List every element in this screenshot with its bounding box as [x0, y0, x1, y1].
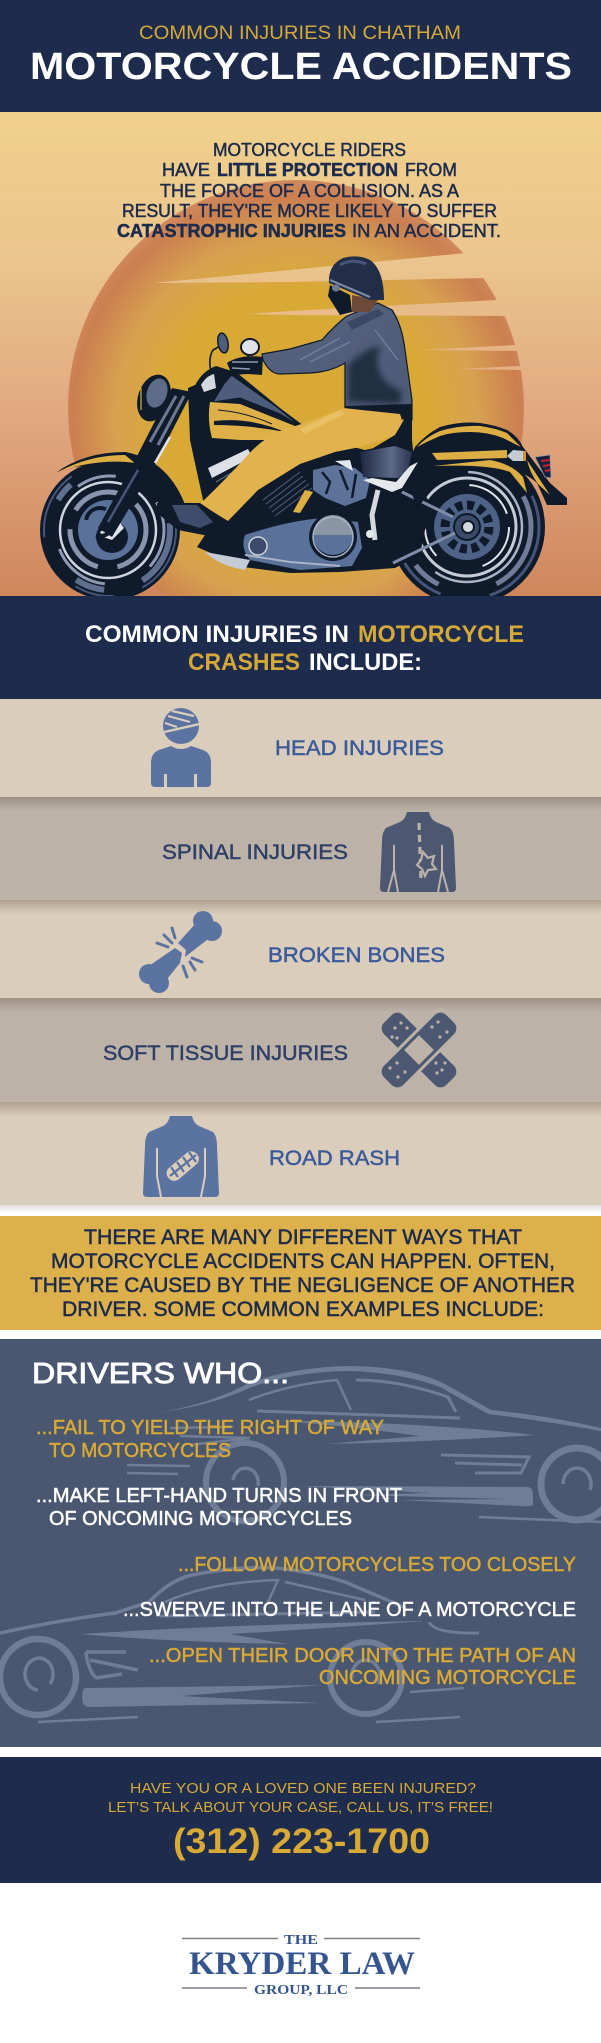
drivers heading: DRIVERS WHO... [32, 1358, 289, 1390]
chrome strip [335, 460, 418, 492]
rider jacket [262, 303, 412, 420]
header subtitle: COMMON INJURIES IN CHATHAM [139, 22, 461, 44]
statement text: DRIVER. SOME COMMON EXAMPLES INCLUDE: [62, 1298, 544, 1321]
headlight [131, 370, 177, 426]
heading text: MOTORCYCLE [358, 621, 524, 648]
hero intro text: MOTORCYCLE RIDERS [213, 140, 406, 160]
rider helmet and face [328, 256, 384, 315]
tank [209, 374, 300, 440]
panel: drivers who [0, 1339, 601, 1747]
motorcycle and rider illustration [40, 256, 567, 605]
heading text: INCLUDE: [309, 649, 422, 676]
hero intro text: LITTLE PROTECTION [217, 160, 398, 180]
label: ROAD RASH [269, 1146, 400, 1170]
glove [227, 356, 263, 375]
statement text: THERE ARE MANY DIFFERENT WAYS THAT [84, 1226, 522, 1249]
front wheel [40, 460, 180, 600]
logo: THE [284, 1933, 318, 1948]
rider boot [157, 503, 228, 537]
row: soft tissue injuries [0, 998, 601, 1102]
label: SPINAL INJURIES [162, 840, 348, 864]
forks [98, 388, 192, 537]
panel: call to action [0, 1757, 601, 1883]
row: spinal injuries [0, 797, 601, 900]
label: SOFT TISSUE INJURIES [103, 1041, 348, 1065]
heading text [85, 621, 524, 676]
row: road rash [0, 1102, 601, 1205]
list of driver behaviours: ...SWERVE INTO THE LANE OF A MOTORCYCLE [123, 1599, 576, 1621]
sun with speed stripes [68, 180, 550, 636]
panel: common injuries heading [0, 596, 601, 699]
call to action text: LET’S TALK ABOUT YOUR CASE, CALL US, IT’S FREE! [108, 1799, 493, 1816]
hero intro text: RESULT, THEY'RE MORE LIKELY TO SUFFER [122, 201, 497, 221]
list of driver behaviours: ...FOLLOW MOTORCYCLES TOO CLOSELY [178, 1554, 576, 1576]
engine details [205, 449, 455, 570]
label: HEAD INJURIES [275, 736, 444, 760]
call to action text: HAVE YOU OR A LOVED ONE BEEN INJURED? [130, 1780, 476, 1797]
hero intro text: THE FORCE OF A COLLISION. AS A [160, 181, 459, 201]
rear wheel [389, 449, 545, 605]
list of driver behaviours [36, 1417, 576, 1689]
hero intro text: IN AN ACCIDENT. [352, 221, 501, 241]
background car two [0, 1568, 479, 1722]
icon: broken bone [139, 911, 222, 993]
header panel [0, 0, 601, 112]
hero intro text: HAVE [162, 160, 210, 180]
list of driver behaviours: ...OPEN THEIR DOOR INTO THE PATH OF AN [149, 1645, 576, 1667]
label: BROKEN BONES [268, 943, 445, 967]
hero intro text [117, 140, 501, 241]
logo [182, 1933, 420, 1998]
hero intro text: FROM [405, 160, 457, 180]
panel: negligence statement [0, 1216, 601, 1330]
rider trousers [200, 408, 412, 521]
boot highlight [172, 505, 213, 528]
logo: KRYDER LAW [189, 1946, 415, 1982]
main title: MOTORCYCLE ACCIDENTS [30, 46, 572, 88]
call to action text [108, 1780, 493, 1816]
list of driver behaviours: ...FAIL TO YIELD THE RIGHT OF WAY [36, 1417, 384, 1439]
row: broken bones [0, 900, 601, 998]
icon: torso with road rash [143, 1116, 219, 1197]
icon: bandaged head [151, 708, 211, 787]
icon: back with spine injury [380, 812, 456, 892]
panel: hero illustration [0, 112, 601, 636]
list of driver behaviours: ...MAKE LEFT-HAND TURNS IN FRONT [36, 1485, 402, 1507]
background car one [127, 1366, 601, 1522]
handlebars and mirrors [193, 332, 259, 396]
list of driver behaviours: ONCOMING MOTORCYCLE [319, 1667, 576, 1689]
list of driver behaviours: TO MOTORCYCLES [49, 1440, 231, 1462]
statement text: MOTORCYCLE ACCIDENTS CAN HAPPEN. OFTEN, [51, 1250, 555, 1273]
list of driver behaviours: OF ONCOMING MOTORCYCLES [49, 1508, 352, 1530]
statement text [30, 1226, 575, 1321]
icon: crossed bandages [373, 1004, 465, 1096]
phone number: (312) 223-1700 [173, 1822, 430, 1861]
hero intro text: CATASTROPHIC INJURIES [117, 221, 346, 241]
heading text: CRASHES [188, 649, 300, 676]
frame and engine silhouette [188, 372, 435, 573]
logo: GROUP, LLC [254, 1983, 348, 1998]
rear fender [405, 422, 567, 510]
row: head injuries [0, 699, 601, 797]
heading text: COMMON INJURIES IN [85, 621, 349, 648]
statement text: THEY'RE CAUSED BY THE NEGLIGENCE OF ANOTHER [30, 1274, 575, 1297]
seat [360, 446, 412, 478]
front fender [57, 452, 187, 512]
